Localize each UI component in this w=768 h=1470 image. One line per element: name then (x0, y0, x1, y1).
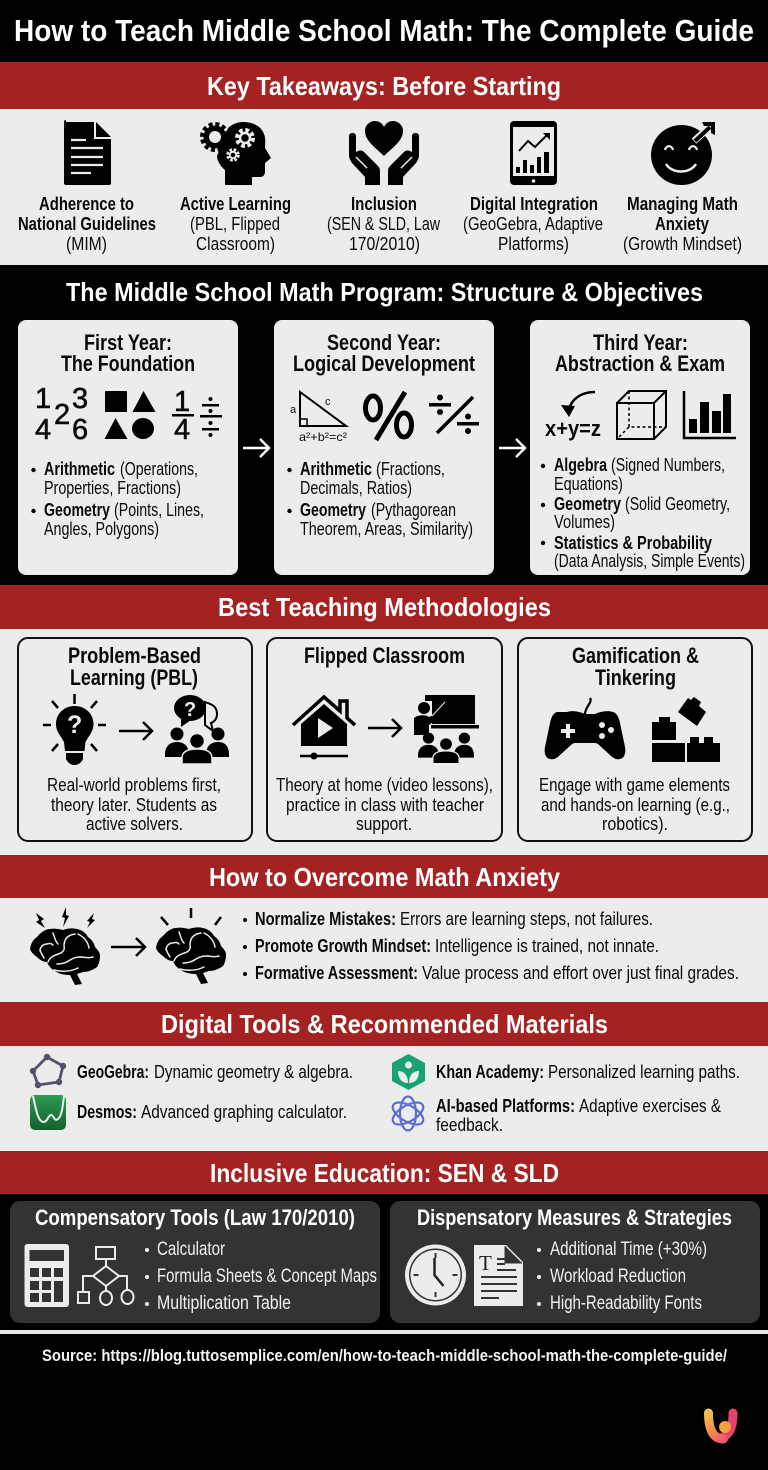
text: digital integration (463, 194, 603, 254)
icon: numbers: 6 (72, 414, 88, 446)
text: khan academy: Khan Academy: (436, 1062, 544, 1082)
icon: right triangle: c (325, 396, 331, 408)
icon: calculator (24, 1244, 69, 1307)
section header: teaching methodologies: Best Teaching Methodologies (218, 592, 551, 622)
section header: teaching methodologies (0, 585, 768, 629)
icon: bar chart (684, 391, 736, 438)
section heading: program structure: The Middle School Math Program: Structure & Objectives (66, 277, 703, 307)
icon: teacher and students (414, 695, 479, 764)
heading: third year (555, 330, 725, 376)
list: third year topics: Algebra (554, 455, 608, 475)
text: inclusion: Inclusion (351, 194, 417, 214)
icon: right triangle: a (290, 404, 297, 416)
icon: head with gears (202, 122, 271, 185)
icon: lightbulb with question mark (43, 694, 106, 765)
text: desmos: Desmos: (77, 1102, 137, 1122)
text: inclusion: (SEN & SLD, Law (327, 214, 441, 234)
arrow: second to third year (499, 439, 525, 457)
text: problem-based description: theory later. Students as (51, 795, 217, 815)
heading: third year: Abstraction & Exam (555, 351, 725, 376)
section header: key takeaways: Key Takeaways: Before Starting (207, 71, 561, 101)
text: flipped classroom description: practice in class with teacher (286, 795, 484, 815)
text: geogebra (77, 1062, 353, 1082)
heading: compensatory tools: Compensatory Tools (Law 170/2010) (35, 1205, 355, 1230)
text: gamification description: and hands-on learning (e.g., (541, 795, 730, 815)
panel: first year (18, 320, 238, 575)
list: first year topics (31, 459, 204, 539)
list: second year topics (287, 459, 473, 539)
text: gamification description: robotics). (602, 814, 668, 834)
list: anxiety strategies: Normalize Mistakes: (255, 909, 396, 929)
text: managing math anxiety (623, 194, 742, 254)
icon: cube (617, 391, 666, 439)
arrow: stress to calm (111, 938, 145, 956)
text: flipped classroom description: support. (356, 814, 412, 834)
text: problem-based description: active solvers. (86, 814, 183, 834)
icon: tablet with growth chart (510, 121, 557, 185)
panel: digital tools (0, 1046, 768, 1151)
list: anxiety strategies: Promote Growth Mindset: (255, 936, 431, 956)
icon: students with speech bubbles (165, 695, 229, 764)
text: problem-based description (47, 775, 221, 834)
section header: math anxiety: How to Overcome Math Anxiety (209, 862, 560, 892)
icon: right triangle: a²+b²=c² (299, 430, 347, 444)
list: compensatory tools (145, 1239, 377, 1314)
icon: fraction and division: 4 (174, 414, 190, 446)
list: dispensatory measures: Workload Reduction (550, 1266, 686, 1287)
icon: house with video (293, 697, 355, 760)
text: ai platforms: AI-based Platforms: (436, 1096, 575, 1116)
heading: problem-based learning: Problem-Based (68, 643, 201, 668)
icon: numbers: 1 (35, 383, 51, 415)
list: first year topics: (Operations, (120, 459, 198, 479)
icon: numbers: 4 (35, 414, 51, 446)
list: third year topics: (Solid Geometry, (625, 494, 730, 514)
list: second year topics: Theorem, Areas, Similarity) (300, 519, 473, 539)
icon: smiling face with arrow (651, 122, 715, 185)
list: first year topics: (Points, Lines, (114, 500, 204, 520)
heading: second year: Second Year: (327, 330, 441, 355)
icon: calm brain (156, 908, 226, 984)
list: third year topics: (Signed Numbers, (611, 455, 725, 475)
icon: equation with curved arrow (545, 392, 601, 441)
section header: digital tools: Digital Tools & Recommended Materials (161, 1009, 608, 1039)
text: geogebra: GeoGebra: (77, 1062, 149, 1082)
list: third year topics: Geometry (554, 494, 621, 514)
icon: document (64, 120, 111, 185)
icon: students with speech bubbles: ? (184, 699, 196, 721)
list: second year topics: Arithmetic (300, 459, 372, 479)
list: third year topics: Equations) (554, 474, 623, 494)
text: adherence to national guidelines: Adherence to (39, 194, 134, 214)
list: second year topics: Geometry (300, 500, 366, 520)
text: active learning (180, 194, 291, 254)
list: first year topics: Arithmetic (44, 459, 115, 479)
text: adherence to national guidelines: (MIM) (66, 234, 107, 254)
panel: flipped classroom (267, 638, 502, 841)
icon: numbers (35, 383, 88, 446)
icon: percent (366, 392, 412, 440)
list: third year topics: Statistics & Probability (554, 533, 712, 553)
heading: gamification and tinkering: Gamification & (572, 643, 699, 668)
section header: digital tools (0, 1002, 768, 1046)
text: inclusion: 170/2010) (349, 234, 420, 254)
icon: game controller (545, 698, 625, 759)
text: gamification description: Engage with game elements (539, 775, 730, 795)
icon: clock (405, 1244, 466, 1306)
list: anxiety strategies: Intelligence is trained, not innate. (435, 936, 659, 956)
icon: stressed brain (30, 907, 100, 985)
text: problem-based description: Real-world problems first, (47, 775, 221, 795)
list: second year topics: (Fractions, (376, 459, 445, 479)
text: ai platforms: feedback. (436, 1115, 503, 1135)
text: managing math anxiety: (Growth Mindset) (623, 234, 742, 254)
arrow: home to class (368, 719, 401, 737)
icon: right triangle (290, 392, 347, 444)
text: digital integration: Platforms) (498, 234, 569, 254)
heading: first year: First Year: (84, 330, 172, 355)
list: dispensatory measures (537, 1239, 707, 1314)
list: second year topics: (Pythagorean (371, 500, 456, 520)
list: third year topics (541, 455, 745, 571)
icon: ai knot (389, 1096, 427, 1130)
heading: third year: Third Year: (593, 330, 688, 355)
list: first year topics: Geometry (44, 500, 110, 520)
icon: desmos (30, 1095, 66, 1130)
heading: problem-based learning: Learning (PBL) (70, 665, 198, 690)
icon: text document (474, 1245, 523, 1306)
text: managing math anxiety: Anxiety (655, 214, 709, 234)
heading: first year (61, 330, 195, 376)
icon: fraction and division: 1 (174, 386, 190, 418)
text: desmos (77, 1102, 347, 1122)
heading: problem-based learning (68, 643, 201, 690)
list: anxiety strategies (243, 909, 739, 983)
text: managing math anxiety: Managing Math (627, 194, 738, 214)
panel: problem-based learning (18, 638, 252, 841)
text: flipped classroom description (276, 775, 493, 834)
panel: second year (274, 320, 494, 575)
section header: math anxiety (0, 855, 768, 898)
list: compensatory tools: Multiplication Table (157, 1293, 291, 1314)
section header: inclusive education: Inclusive Education: SEN & SLD (210, 1158, 559, 1188)
text: flipped classroom description: Theory at home (video lessons), (276, 775, 493, 795)
icon: division fraction (429, 394, 479, 434)
list: anxiety strategies: Errors are learning steps, not failures. (400, 909, 653, 929)
list: third year topics: Volumes) (554, 512, 615, 532)
text: active learning: Classroom) (196, 234, 275, 254)
icon: text document: T (479, 1251, 492, 1275)
list: compensatory tools: Formula Sheets & Concept Maps (157, 1266, 377, 1287)
section header: key takeaways (0, 62, 768, 109)
text: geogebra: Dynamic geometry & algebra. (154, 1062, 353, 1082)
panel: key takeaways (0, 109, 768, 265)
text: desmos: Advanced graphing calculator. (141, 1102, 347, 1122)
heading: gamification and tinkering: Tinkering (595, 665, 676, 690)
icon: hands holding heart (349, 121, 419, 185)
text: inclusion (327, 194, 441, 254)
section header: inclusive education (0, 1151, 768, 1194)
icon: geogebra (30, 1054, 66, 1088)
list: dispensatory measures: Additional Time (+30%) (550, 1239, 707, 1260)
panel: methodologies background (0, 629, 768, 855)
list: first year topics: Properties, Fractions) (44, 478, 181, 498)
heading: first year: The Foundation (61, 351, 195, 376)
icon: numbers: 3 (72, 383, 88, 415)
icon: lightbulb with question mark: ? (67, 711, 82, 739)
icon: logo (708, 1413, 733, 1439)
list: compensatory tools: Calculator (157, 1239, 226, 1260)
list: first year topics: Angles, Polygons) (44, 519, 159, 539)
arrow: first to second year (243, 439, 269, 457)
panel: gamification and tinkering (518, 638, 752, 841)
icon: shapes (104, 391, 156, 439)
text: active learning: Active Learning (180, 194, 291, 214)
list: dispensatory measures: High-Readability Fonts (550, 1293, 702, 1314)
text: khan academy (436, 1062, 740, 1082)
text: ai platforms (436, 1096, 721, 1135)
text: adherence to national guidelines (18, 194, 156, 254)
heading: second year (293, 330, 476, 376)
icon: building blocks (652, 697, 720, 762)
heading: second year: Logical Development (293, 351, 476, 376)
text: active learning: (PBL, Flipped (190, 214, 280, 234)
panel: compensatory tools (10, 1201, 380, 1323)
panel: math anxiety (0, 898, 768, 1002)
icon: equation with curved arrow: x+y=z (545, 416, 601, 441)
list: anxiety strategies: Formative Assessment: (255, 963, 418, 983)
heading: gamification and tinkering (572, 643, 699, 690)
text: digital integration: (GeoGebra, Adaptive (463, 214, 603, 234)
panel: third year (530, 320, 750, 575)
text: gamification description (539, 775, 730, 834)
heading: flipped classroom: Flipped Classroom (304, 643, 465, 668)
panel: dispensatory measures (390, 1201, 760, 1323)
text: digital integration: Digital Integration (470, 194, 598, 214)
text: adherence to national guidelines: National Guidelines (18, 214, 156, 234)
list: second year topics: Decimals, Ratios) (300, 478, 412, 498)
icon: khan academy (392, 1054, 425, 1090)
text: ai platforms: Adaptive exercises & (579, 1096, 721, 1116)
icon: numbers: 2 (54, 399, 70, 431)
icon: concept map (78, 1247, 134, 1305)
arrow: problem to students (119, 722, 152, 740)
icon: fraction and division (172, 386, 222, 446)
